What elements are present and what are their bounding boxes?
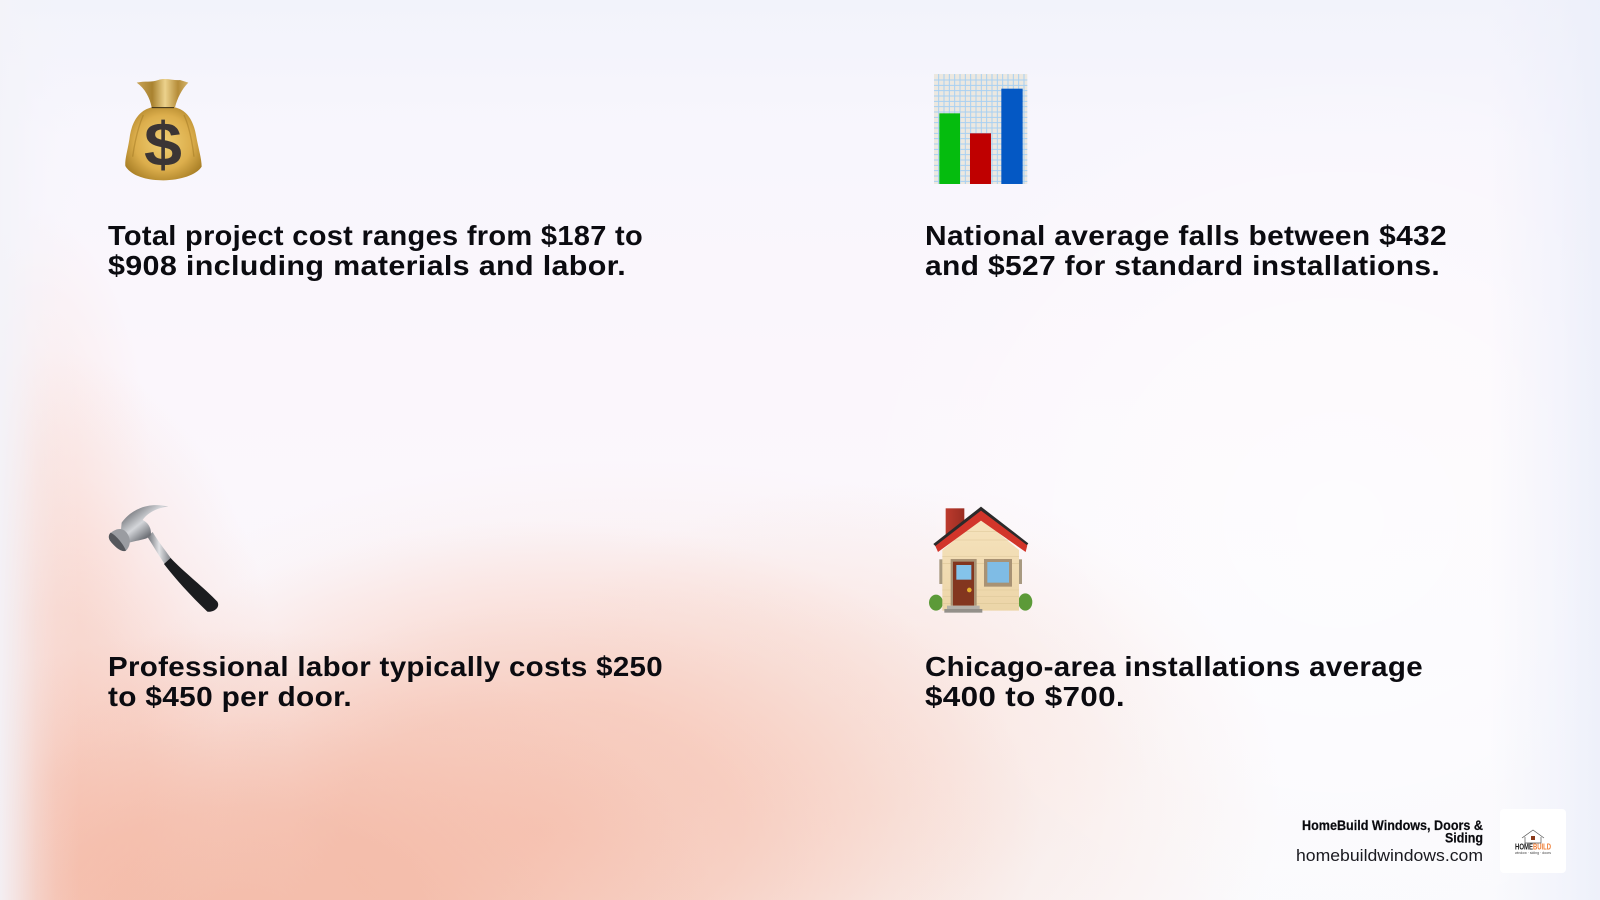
company name: [1302, 818, 1483, 846]
text: professional labor: Professional labor typically costs $250: [108, 651, 663, 682]
icon: money bag: [125, 79, 202, 180]
text: chicago-area installs: Chicago-area installations average: [925, 651, 1423, 682]
blue bar: [1001, 89, 1023, 184]
text: chicago-area installs: $400 to $700.: [925, 681, 1125, 712]
text: professional labor: to $450 per door.: [108, 681, 352, 712]
company name: HomeBuild Windows, Doors &: [1302, 818, 1483, 833]
text: chicago-area installs: [925, 651, 1423, 712]
text: total project cost: [108, 220, 643, 281]
text: national average: and $527 for standard installations.: [925, 250, 1440, 281]
logo card: HOME: [1515, 842, 1533, 852]
text: professional labor: [108, 651, 663, 712]
footer: company branding: [1296, 809, 1566, 873]
text: total project cost: $908 including materials and labor.: [108, 250, 626, 281]
panel: total project cost: [108, 79, 643, 281]
dollar sign: $: [144, 110, 182, 179]
red bar: [970, 133, 991, 184]
panel: chicago-area installs: [925, 507, 1423, 712]
logo card: window · siding · doors: [1515, 851, 1551, 855]
website url: homebuildwindows.com: [1296, 846, 1483, 865]
logo card: BUILD: [1533, 842, 1551, 852]
text: national average: [925, 220, 1447, 281]
logo card: [1500, 809, 1566, 873]
text: national average: National average falls between $432: [925, 220, 1447, 251]
icon: bar chart: [934, 74, 1027, 184]
green bar: [939, 113, 960, 184]
icon: hammer: [109, 505, 218, 612]
icon: house: [929, 507, 1032, 613]
text: total project cost: Total project cost ranges from $187 to: [108, 220, 643, 251]
panel: professional labor: [108, 505, 663, 712]
company name: Siding: [1445, 830, 1483, 846]
panel: national average: [925, 74, 1447, 281]
